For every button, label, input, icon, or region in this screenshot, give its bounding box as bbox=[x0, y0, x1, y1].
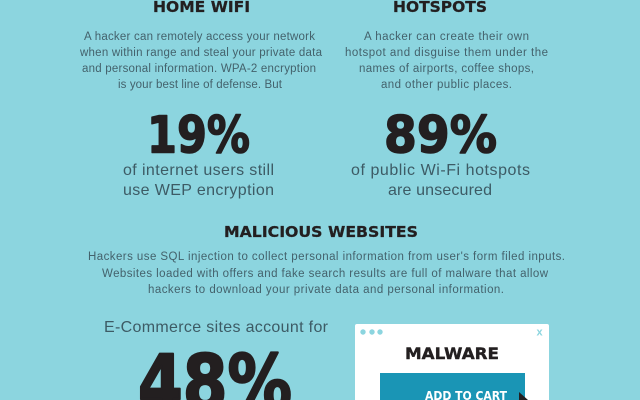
illustration: malware browser window bbox=[355, 324, 549, 400]
text block: home wifi description bbox=[79, 31, 323, 91]
stat caption: WEP encryption: use WEP encryption bbox=[123, 182, 274, 199]
panel: home wifi bbox=[79, 0, 323, 199]
heading: malicious websites: MALICIOUS WEBSITES bbox=[224, 223, 418, 241]
panel: hotspots bbox=[345, 0, 548, 199]
text block: home wifi description: when within range and steal your private data bbox=[79, 47, 323, 59]
stat caption: WEP encryption: of internet users still bbox=[123, 162, 274, 179]
window title: malware: MALWARE bbox=[405, 344, 499, 363]
stat caption: unsecured hotspots bbox=[351, 162, 530, 199]
text block: hotspots description: hotspot and disguise them under the bbox=[345, 47, 548, 59]
text block: home wifi description: A hacker can remotely access your network bbox=[84, 31, 315, 43]
stat caption: WEP encryption bbox=[123, 162, 274, 199]
text block: hotspots description: A hacker can create their own bbox=[364, 31, 529, 43]
stat: 19%: 19% bbox=[147, 106, 250, 166]
button: add to cart bbox=[380, 373, 525, 400]
text block: malicious websites description: Hackers use SQL injection to collect personal information from user's form filed inputs. bbox=[88, 251, 565, 263]
window frame bbox=[355, 324, 549, 400]
icon: close x: x bbox=[536, 326, 543, 338]
window control dots bbox=[360, 329, 383, 335]
stat caption: unsecured hotspots: of public Wi-Fi hotspots bbox=[351, 162, 530, 179]
icon: cursor arrow bbox=[519, 392, 528, 400]
stat caption: unsecured hotspots: are unsecured bbox=[388, 182, 492, 199]
text block: hotspots description: and other public places. bbox=[381, 79, 512, 91]
stat caption: e-commerce: E-Commerce sites account for bbox=[104, 319, 329, 336]
text block: home wifi description: is your best line of defense. But bbox=[118, 79, 283, 91]
panel: malicious websites bbox=[88, 223, 565, 400]
text block: malicious websites description bbox=[88, 251, 565, 296]
text block: home wifi description: and personal information. WPA-2 encryption bbox=[82, 63, 316, 75]
text block: malicious websites description: Websites loaded with offers and fake search results are full of malware that allow bbox=[102, 268, 549, 280]
text block: malicious websites description: hackers to download your private data and personal information. bbox=[148, 284, 504, 296]
text block: hotspots description: names of airports, coffee shops, bbox=[359, 63, 534, 75]
text block: hotspots description bbox=[345, 31, 548, 91]
stat: 89%: 89% bbox=[384, 106, 497, 166]
